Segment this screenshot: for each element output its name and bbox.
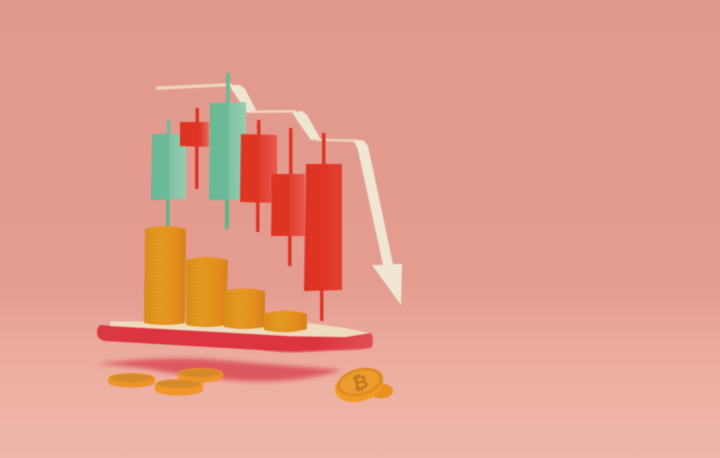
arrow shaft and head xyxy=(354,140,402,305)
thin segment two xyxy=(250,110,296,113)
front coin face xyxy=(334,363,386,401)
rear coin xyxy=(369,384,393,398)
candle 4: red xyxy=(240,120,277,232)
floor shadow under phone xyxy=(96,359,342,381)
falling arrow ribbon xyxy=(156,83,402,305)
candle 5: red xyxy=(271,128,305,266)
phone screen xyxy=(110,322,371,338)
coin stack 4 xyxy=(264,310,307,332)
thin segment one xyxy=(156,83,232,90)
loose coin back xyxy=(178,368,223,382)
coin stack 1 xyxy=(144,226,186,325)
loose coin front xyxy=(155,379,203,396)
candle 6: large red xyxy=(304,133,342,321)
descending segment two xyxy=(292,111,321,140)
bitcoin symbol: ₿ xyxy=(350,371,370,395)
phone xyxy=(97,322,373,352)
bitcoin coin pair xyxy=(331,363,393,407)
candle 3: tall green xyxy=(209,73,246,229)
coin stack 3 xyxy=(224,288,265,329)
candle 2: small red xyxy=(180,108,209,189)
loose coin left xyxy=(108,373,155,388)
descending segment one xyxy=(229,85,257,113)
coin stack 2 xyxy=(186,257,228,327)
phone lower edge highlight xyxy=(270,347,370,352)
thin segment three xyxy=(316,138,358,142)
front coin edge xyxy=(331,365,387,407)
candle 1: green xyxy=(151,120,186,226)
phone body xyxy=(97,325,373,352)
